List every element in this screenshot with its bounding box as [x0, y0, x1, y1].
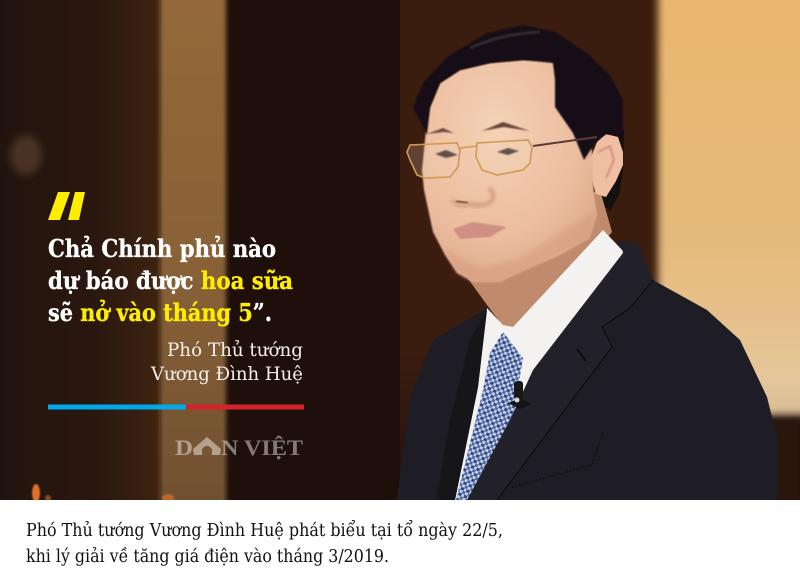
jaw shadow	[445, 210, 597, 282]
lapel notch line	[497, 280, 653, 500]
glasses	[407, 137, 597, 178]
quote line 3: sẽ nở vào tháng 5”.	[48, 298, 272, 327]
attribution name: Vương Đình Huệ	[150, 363, 303, 385]
hair	[413, 25, 623, 160]
eyes	[435, 148, 519, 158]
quotation mark	[48, 192, 85, 220]
quote line 1: Chả Chính phủ nào	[48, 234, 276, 263]
quote text	[48, 234, 293, 327]
ear	[590, 134, 623, 197]
chest pocket	[512, 432, 603, 487]
right lapel	[467, 240, 653, 500]
caption text	[26, 521, 503, 567]
face	[422, 60, 597, 282]
nose	[452, 188, 493, 205]
attribution title: Phó Thủ tướng	[167, 339, 303, 361]
hair sheen	[470, 32, 540, 48]
quote line 2: dự báo được hoa sữa	[48, 266, 293, 295]
eyebrows	[427, 122, 530, 134]
nostril shadow	[456, 201, 468, 203]
caption text: khi lý giải về tăng giá điện vào tháng 3/2019.	[26, 547, 389, 567]
portrait of the speaker	[397, 25, 777, 500]
logo: Dan Viet: D	[175, 435, 193, 460]
shirt	[455, 230, 625, 500]
hair behind ear	[596, 130, 624, 211]
neck	[440, 190, 612, 328]
caption panel	[0, 500, 800, 577]
mouth	[453, 222, 507, 239]
left lapel	[436, 310, 487, 500]
tie	[456, 332, 523, 500]
lapel buttonhole	[577, 349, 586, 361]
logo: Dan Viet	[175, 435, 303, 460]
lapel microphone	[508, 381, 532, 409]
caption text: Phó Thủ tướng Vương Đình Huệ phát biểu tại tổ ngày 22/5,	[26, 521, 503, 541]
divider bar	[48, 404, 304, 410]
logo: Dan Viet: N VIỆT	[221, 435, 303, 460]
attribution	[150, 339, 303, 385]
jacket	[397, 240, 777, 500]
